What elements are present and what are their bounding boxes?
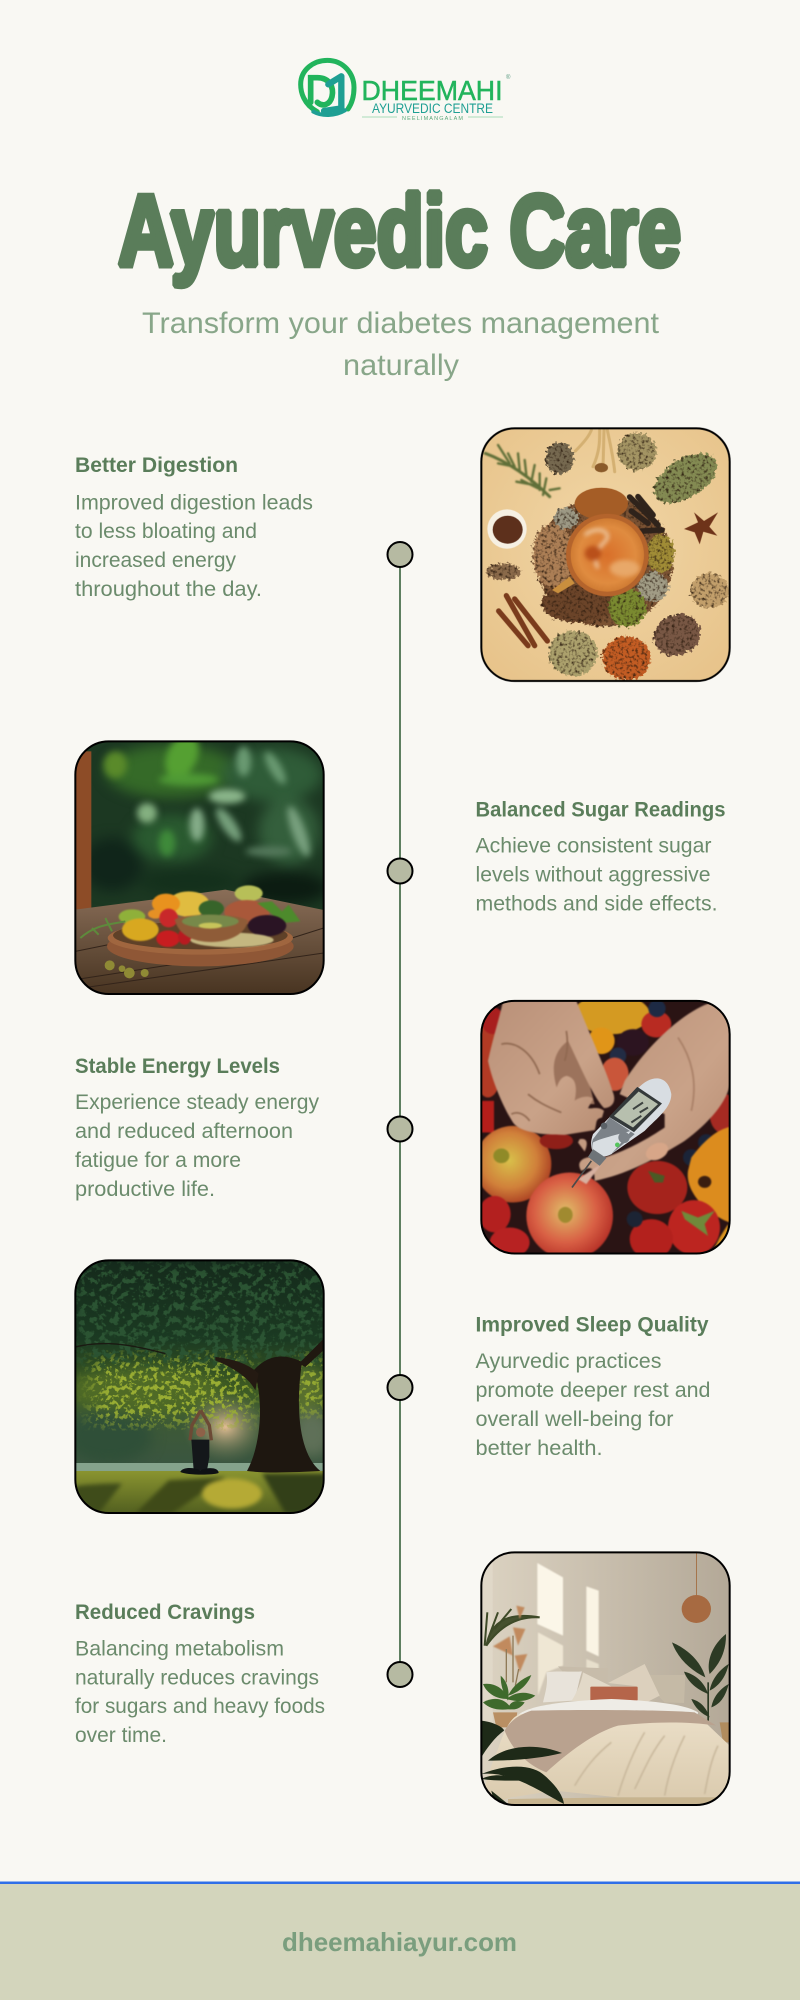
body text: Achieve consistent sugar	[476, 834, 712, 858]
icon: logo emblem	[301, 60, 354, 115]
body text: promote deeper rest and	[476, 1379, 710, 1402]
subtitle	[142, 307, 660, 382]
image frame	[481, 1001, 730, 1253]
body text	[75, 492, 313, 601]
body text: to less bloating and	[75, 520, 257, 543]
logo location: NEELIMANGALAM	[402, 116, 463, 122]
body text: Experience steady energy	[75, 1091, 320, 1114]
heading: Better Digestion	[75, 454, 238, 477]
body text: productive life.	[75, 1178, 215, 1201]
body text: Ayurvedic practices	[476, 1350, 662, 1373]
heading: Improved Sleep Quality	[476, 1314, 709, 1336]
text block: Improved Sleep Quality	[476, 1314, 710, 1460]
timeline spine	[388, 542, 412, 1687]
timeline node 4	[388, 1375, 412, 1400]
body text	[75, 1638, 325, 1747]
body text: methods and side effects.	[476, 892, 718, 916]
logo rule left	[362, 116, 397, 118]
body text: Improved digestion leads	[75, 492, 313, 514]
image frame	[75, 1260, 324, 1513]
text block: Stable Energy Levels	[75, 1055, 320, 1201]
timeline node 1	[388, 542, 412, 567]
image frame	[481, 428, 730, 681]
photo: spices and herbal tea	[478, 425, 733, 685]
footer band	[0, 1882, 800, 2000]
registered mark: ®	[506, 74, 511, 81]
subtitle: Transform your diabetes management	[142, 307, 660, 340]
photo: food plate in garden	[72, 729, 329, 998]
logo: Dheemahi Ayurvedic Centre	[301, 60, 511, 122]
body text: for sugars and heavy foods	[75, 1695, 325, 1718]
body text	[476, 834, 718, 916]
heading: Stable Energy Levels	[75, 1055, 280, 1078]
photo: hands using glucose meter over fruit	[471, 994, 740, 1259]
body text: fatigue for a more	[75, 1149, 241, 1172]
timeline node 3	[388, 1116, 412, 1142]
footer website: dheemahiayur.com	[282, 1927, 517, 1957]
body text: levels without aggressive	[476, 864, 710, 886]
body text: better health.	[476, 1437, 602, 1460]
body text: throughout the day.	[75, 578, 262, 601]
body text: Balancing metabolism	[75, 1638, 284, 1660]
body text: overall well-being for	[476, 1408, 674, 1431]
image frame	[481, 1552, 730, 1805]
text block: Better Digestion	[75, 454, 313, 601]
text block: Balanced Sugar Readings	[476, 798, 726, 916]
body text: and reduced afternoon	[75, 1120, 293, 1143]
text block: Reduced Cravings	[75, 1601, 325, 1747]
image frame	[75, 741, 324, 994]
body text: over time.	[75, 1724, 167, 1747]
timeline node 2	[388, 858, 412, 884]
body text	[75, 1091, 320, 1201]
heading: Reduced Cravings	[75, 1601, 255, 1624]
photo: calm bedroom	[478, 1549, 733, 1809]
logo wordmark: DHEEMAHI	[362, 75, 502, 106]
subtitle: naturally	[343, 349, 459, 382]
body text: naturally reduces cravings	[75, 1666, 319, 1690]
logo subtitle: AYURVEDIC CENTRE	[372, 101, 493, 116]
body text	[476, 1350, 710, 1460]
body text: increased energy	[75, 549, 236, 572]
timeline node 5	[388, 1662, 412, 1687]
heading: Balanced Sugar Readings	[476, 798, 726, 822]
photo: yoga under a tree	[65, 1257, 332, 1518]
logo rule right	[468, 116, 503, 118]
